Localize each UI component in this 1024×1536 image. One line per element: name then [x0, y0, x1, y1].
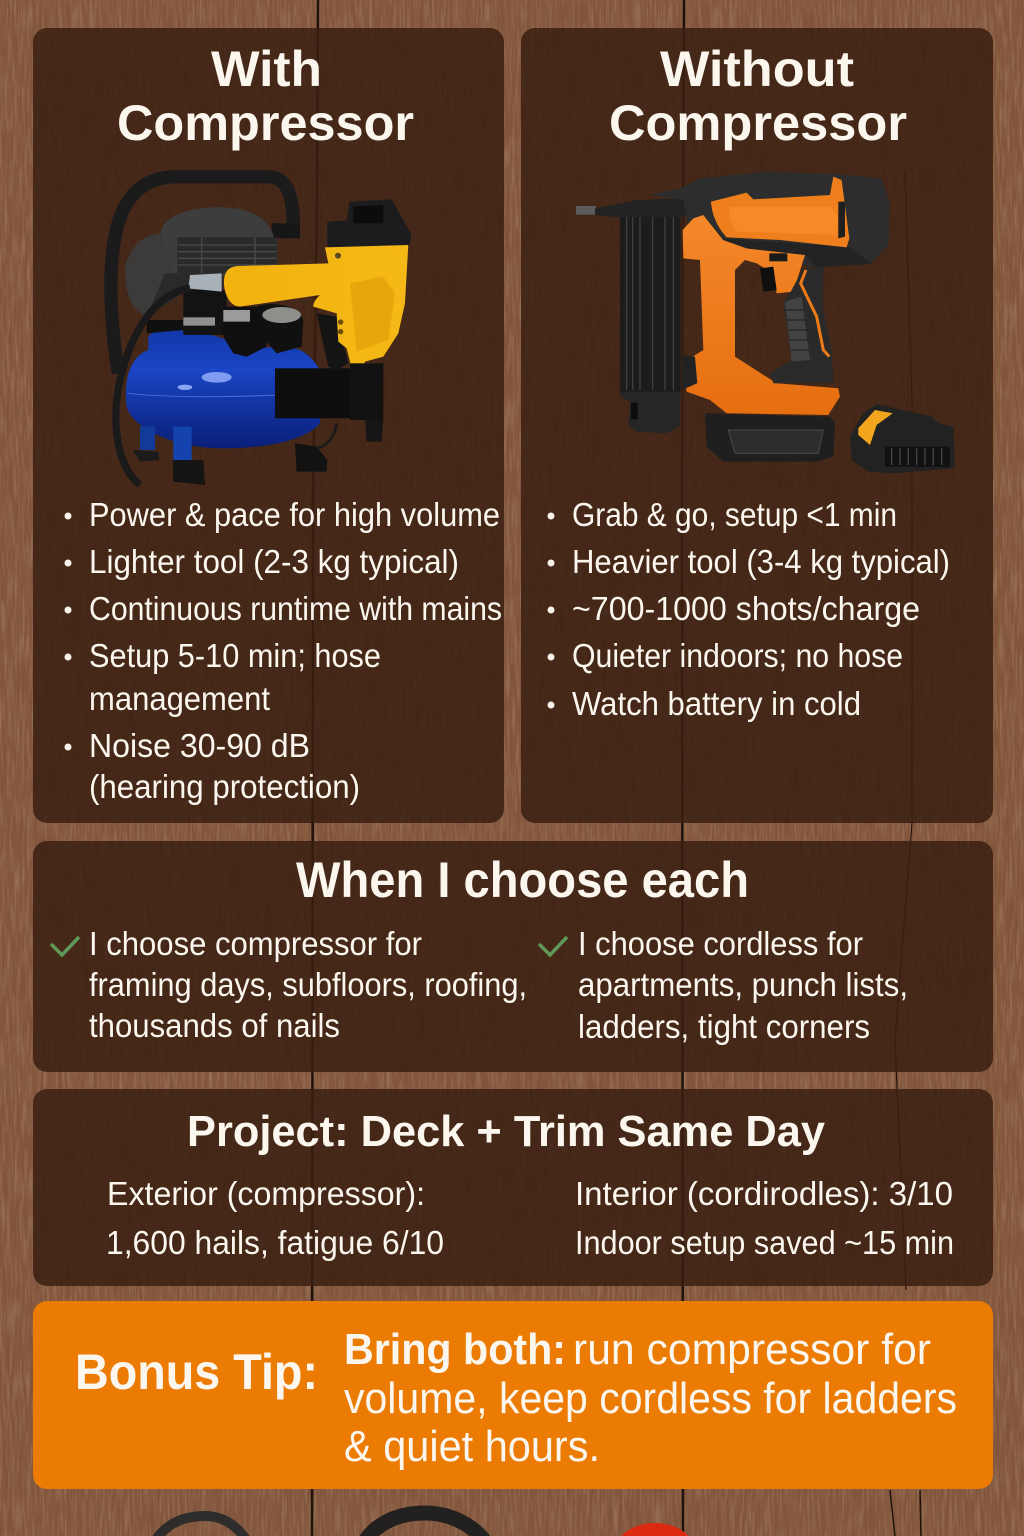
icon: cordless nailer with battery — [576, 172, 955, 473]
text: compressor choice: framing days, subfloors, roofing, — [89, 966, 527, 1003]
text: interior stats: Indoor setup saved ~15 min — [575, 1224, 954, 1261]
icon: check mark right — [539, 937, 567, 955]
text: exterior stats — [106, 1175, 444, 1261]
text: interior stats: Interior (cordirodles): 3/10 — [575, 1175, 953, 1212]
list: without compressor bullets: Quieter indoors; no hose — [572, 637, 903, 674]
list: with compressor bullets: (hearing protection) — [89, 768, 360, 805]
list: without compressor bullets: Heavier tool (3-4 kg typical) — [572, 543, 950, 580]
panel: when I choose each — [33, 841, 993, 1072]
text: bonus tip body — [344, 1325, 957, 1471]
icon: check mark left — [51, 937, 79, 955]
text: interior stats — [575, 1175, 954, 1261]
heading: when I choose each: When I choose each — [296, 852, 749, 908]
text: cordless choice — [578, 925, 908, 1045]
heading: without compressor — [609, 41, 907, 151]
text: cordless choice: apartments, punch lists, — [578, 966, 908, 1003]
list: without compressor bullets: ~700-1000 shots/charge — [572, 590, 920, 627]
text: compressor choice — [89, 925, 527, 1044]
icon: air compressor and coil nailer — [111, 177, 412, 485]
callout: bonus tip — [33, 1301, 993, 1489]
heading: project: Project: Deck + Trim Same Day — [187, 1107, 826, 1156]
panel: without compressor — [521, 28, 993, 823]
panel: with compressor — [33, 28, 504, 823]
text: cordless choice: ladders, tight corners — [578, 1008, 870, 1045]
heading: with compressor: Compressor — [117, 95, 414, 151]
text: exterior stats: 1,600 hails, fatigue 6/10 — [106, 1224, 444, 1261]
list: with compressor bullets: management — [89, 680, 270, 717]
text: exterior stats: Exterior (compressor): — [107, 1175, 425, 1212]
text: compressor choice: thousands of nails — [89, 1007, 340, 1044]
icon: cropped tools at bottom edge — [152, 1513, 693, 1536]
list: with compressor bullets: Continuous runtime with mains — [89, 590, 502, 627]
list: without compressor bullets: Watch battery in cold — [572, 685, 861, 722]
text: cordless choice: I choose cordless for — [578, 925, 863, 962]
heading: without compressor: Without — [660, 41, 854, 97]
list: without compressor bullets: Grab & go, setup <1 min — [572, 496, 897, 533]
text: bonus tip body: volume, keep cordless for ladders — [344, 1374, 957, 1423]
list: with compressor bullets — [64, 496, 502, 805]
list: with compressor bullets: Noise 30-90 dB — [89, 727, 310, 764]
list: with compressor bullets: Setup 5-10 min; hose — [89, 637, 381, 674]
text: compressor choice: I choose compressor for — [89, 925, 422, 962]
text: bonus tip body: & quiet hours. — [344, 1422, 600, 1471]
label: bonus tip: Bonus Tip: — [75, 1344, 318, 1400]
heading: with compressor — [117, 41, 414, 151]
list: with compressor bullets: Lighter tool (2-3 kg typical) — [89, 543, 459, 580]
text: bonus tip body: run compressor for — [573, 1325, 931, 1374]
heading: with compressor: With — [211, 41, 322, 97]
list: with compressor bullets: Power & pace for high volume — [89, 496, 500, 533]
panel: project — [33, 1089, 993, 1286]
text: bonus tip body: Bring both: — [344, 1325, 566, 1374]
list: without compressor bullets — [548, 496, 950, 722]
heading: without compressor: Compressor — [609, 95, 907, 151]
